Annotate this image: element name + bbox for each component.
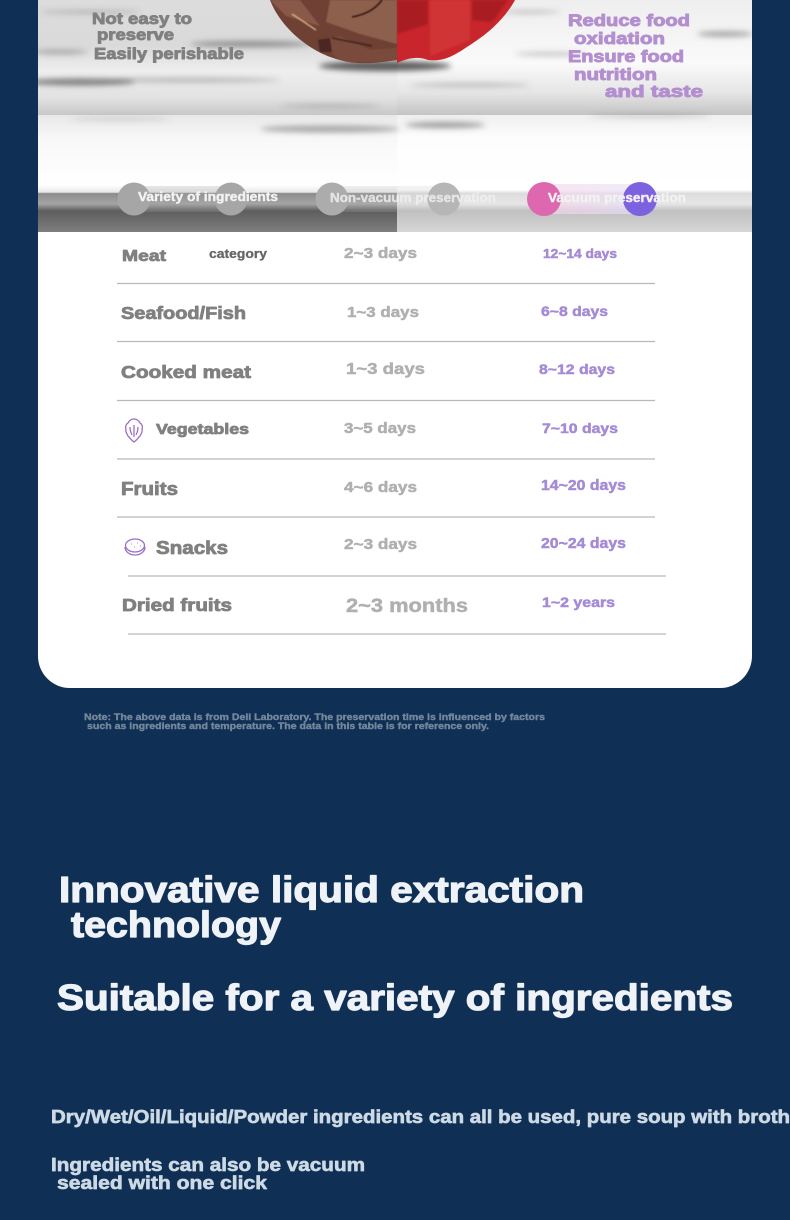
panel: comparison card bbox=[25, 0, 753, 688]
row: dried fruits bbox=[122, 594, 615, 617]
right callout: benefits: Ensure food bbox=[568, 47, 684, 66]
right callout: benefits: Reduce food bbox=[568, 11, 690, 30]
right callout: benefits: oxidation bbox=[574, 29, 665, 48]
row: vegetables: Vegetables bbox=[156, 421, 249, 438]
row: cooked meat bbox=[121, 361, 615, 382]
red half bbox=[397, 0, 515, 63]
row: fruits: 14~20 days bbox=[541, 478, 626, 494]
heading: suitable for a variety of ingredients: Suitable for a variety of ingredients bbox=[57, 977, 733, 1018]
row: cooked meat: 8~12 days bbox=[539, 361, 615, 377]
row: snacks: 2~3 days bbox=[344, 537, 417, 553]
row: snacks: 20~24 days bbox=[541, 536, 626, 552]
right callout: benefits: nutrition bbox=[574, 65, 657, 84]
right callout: benefits bbox=[568, 11, 703, 101]
row: meat: Meat bbox=[122, 248, 167, 265]
icon: leafy vegetable bbox=[126, 419, 142, 442]
row: seafood/fish bbox=[121, 303, 608, 323]
marble photo with half-and-half apple bbox=[25, 0, 753, 232]
row: snacks bbox=[125, 536, 626, 558]
table header: variety of ingredients bbox=[118, 182, 278, 216]
row: meat bbox=[122, 246, 617, 265]
text block: one-click vacuum sealing: sealed with one click bbox=[57, 1172, 268, 1193]
row: vegetables: 7~10 days bbox=[542, 420, 618, 436]
table header: non-vacuum preservation: Non-vacuum preservation bbox=[330, 191, 496, 205]
row: vegetables bbox=[126, 419, 618, 442]
row: dried fruits: 1~2 years bbox=[542, 594, 615, 610]
row: seafood/fish: 6~8 days bbox=[541, 303, 608, 319]
row: fruits: 4~6 days bbox=[344, 480, 417, 496]
chocolate half bbox=[270, 0, 397, 63]
icon: biscuit bbox=[125, 539, 145, 555]
table header: vacuum preservation: Vacuum preservation bbox=[548, 191, 686, 205]
text block: one-click vacuum sealing bbox=[51, 1154, 365, 1193]
heading: innovative liquid extraction technology: Innovative liquid extraction bbox=[59, 869, 584, 910]
row: dried fruits: 2~3 months bbox=[346, 596, 468, 617]
left callout: drawbacks: Easily perishable bbox=[94, 46, 244, 63]
row: vegetables: 3~5 days bbox=[344, 421, 416, 437]
text block: one-click vacuum sealing: Ingredients can also be vacuum bbox=[51, 1154, 365, 1175]
table header: variety of ingredients: Variety of ingredients bbox=[138, 190, 278, 204]
row: seafood/fish: 1~3 days bbox=[347, 305, 419, 321]
apple shadow bbox=[319, 61, 451, 71]
row: dried fruits: Dried fruits bbox=[122, 595, 232, 615]
row: seafood/fish: Seafood/Fish bbox=[121, 303, 246, 323]
row: cooked meat: Cooked meat bbox=[121, 362, 251, 382]
footnote: such as ingredients and temperature. The data in this table is for reference only. bbox=[87, 721, 489, 732]
table row dividers bbox=[117, 284, 666, 634]
left callout: drawbacks bbox=[92, 11, 244, 63]
right callout: benefits: and taste bbox=[605, 82, 703, 101]
left callout: drawbacks: preserve bbox=[97, 27, 174, 44]
table header: vacuum preservation bbox=[527, 182, 686, 216]
left callout: drawbacks: Not easy to bbox=[92, 11, 192, 28]
row: fruits: Fruits bbox=[121, 479, 178, 499]
row: meat: 12~14 days bbox=[543, 247, 617, 261]
row: cooked meat: 1~3 days bbox=[346, 361, 425, 378]
table header: non-vacuum preservation bbox=[316, 182, 496, 216]
footnote: Note: The above data is from Deli Laboratory. The preservation time is influenced by factors bbox=[84, 712, 545, 723]
row: fruits bbox=[121, 478, 626, 499]
heading: innovative liquid extraction technology: technology bbox=[71, 904, 281, 945]
text block: ingredient types: Dry/Wet/Oil/Liquid/Powder ingredients can all be used, pure soup with broth bbox=[51, 1106, 790, 1127]
heading: innovative liquid extraction technology bbox=[59, 869, 584, 945]
footnote bbox=[84, 712, 545, 732]
row: meat: category bbox=[209, 247, 267, 261]
row: meat: 2~3 days bbox=[344, 246, 417, 262]
row: snacks: Snacks bbox=[156, 538, 228, 558]
